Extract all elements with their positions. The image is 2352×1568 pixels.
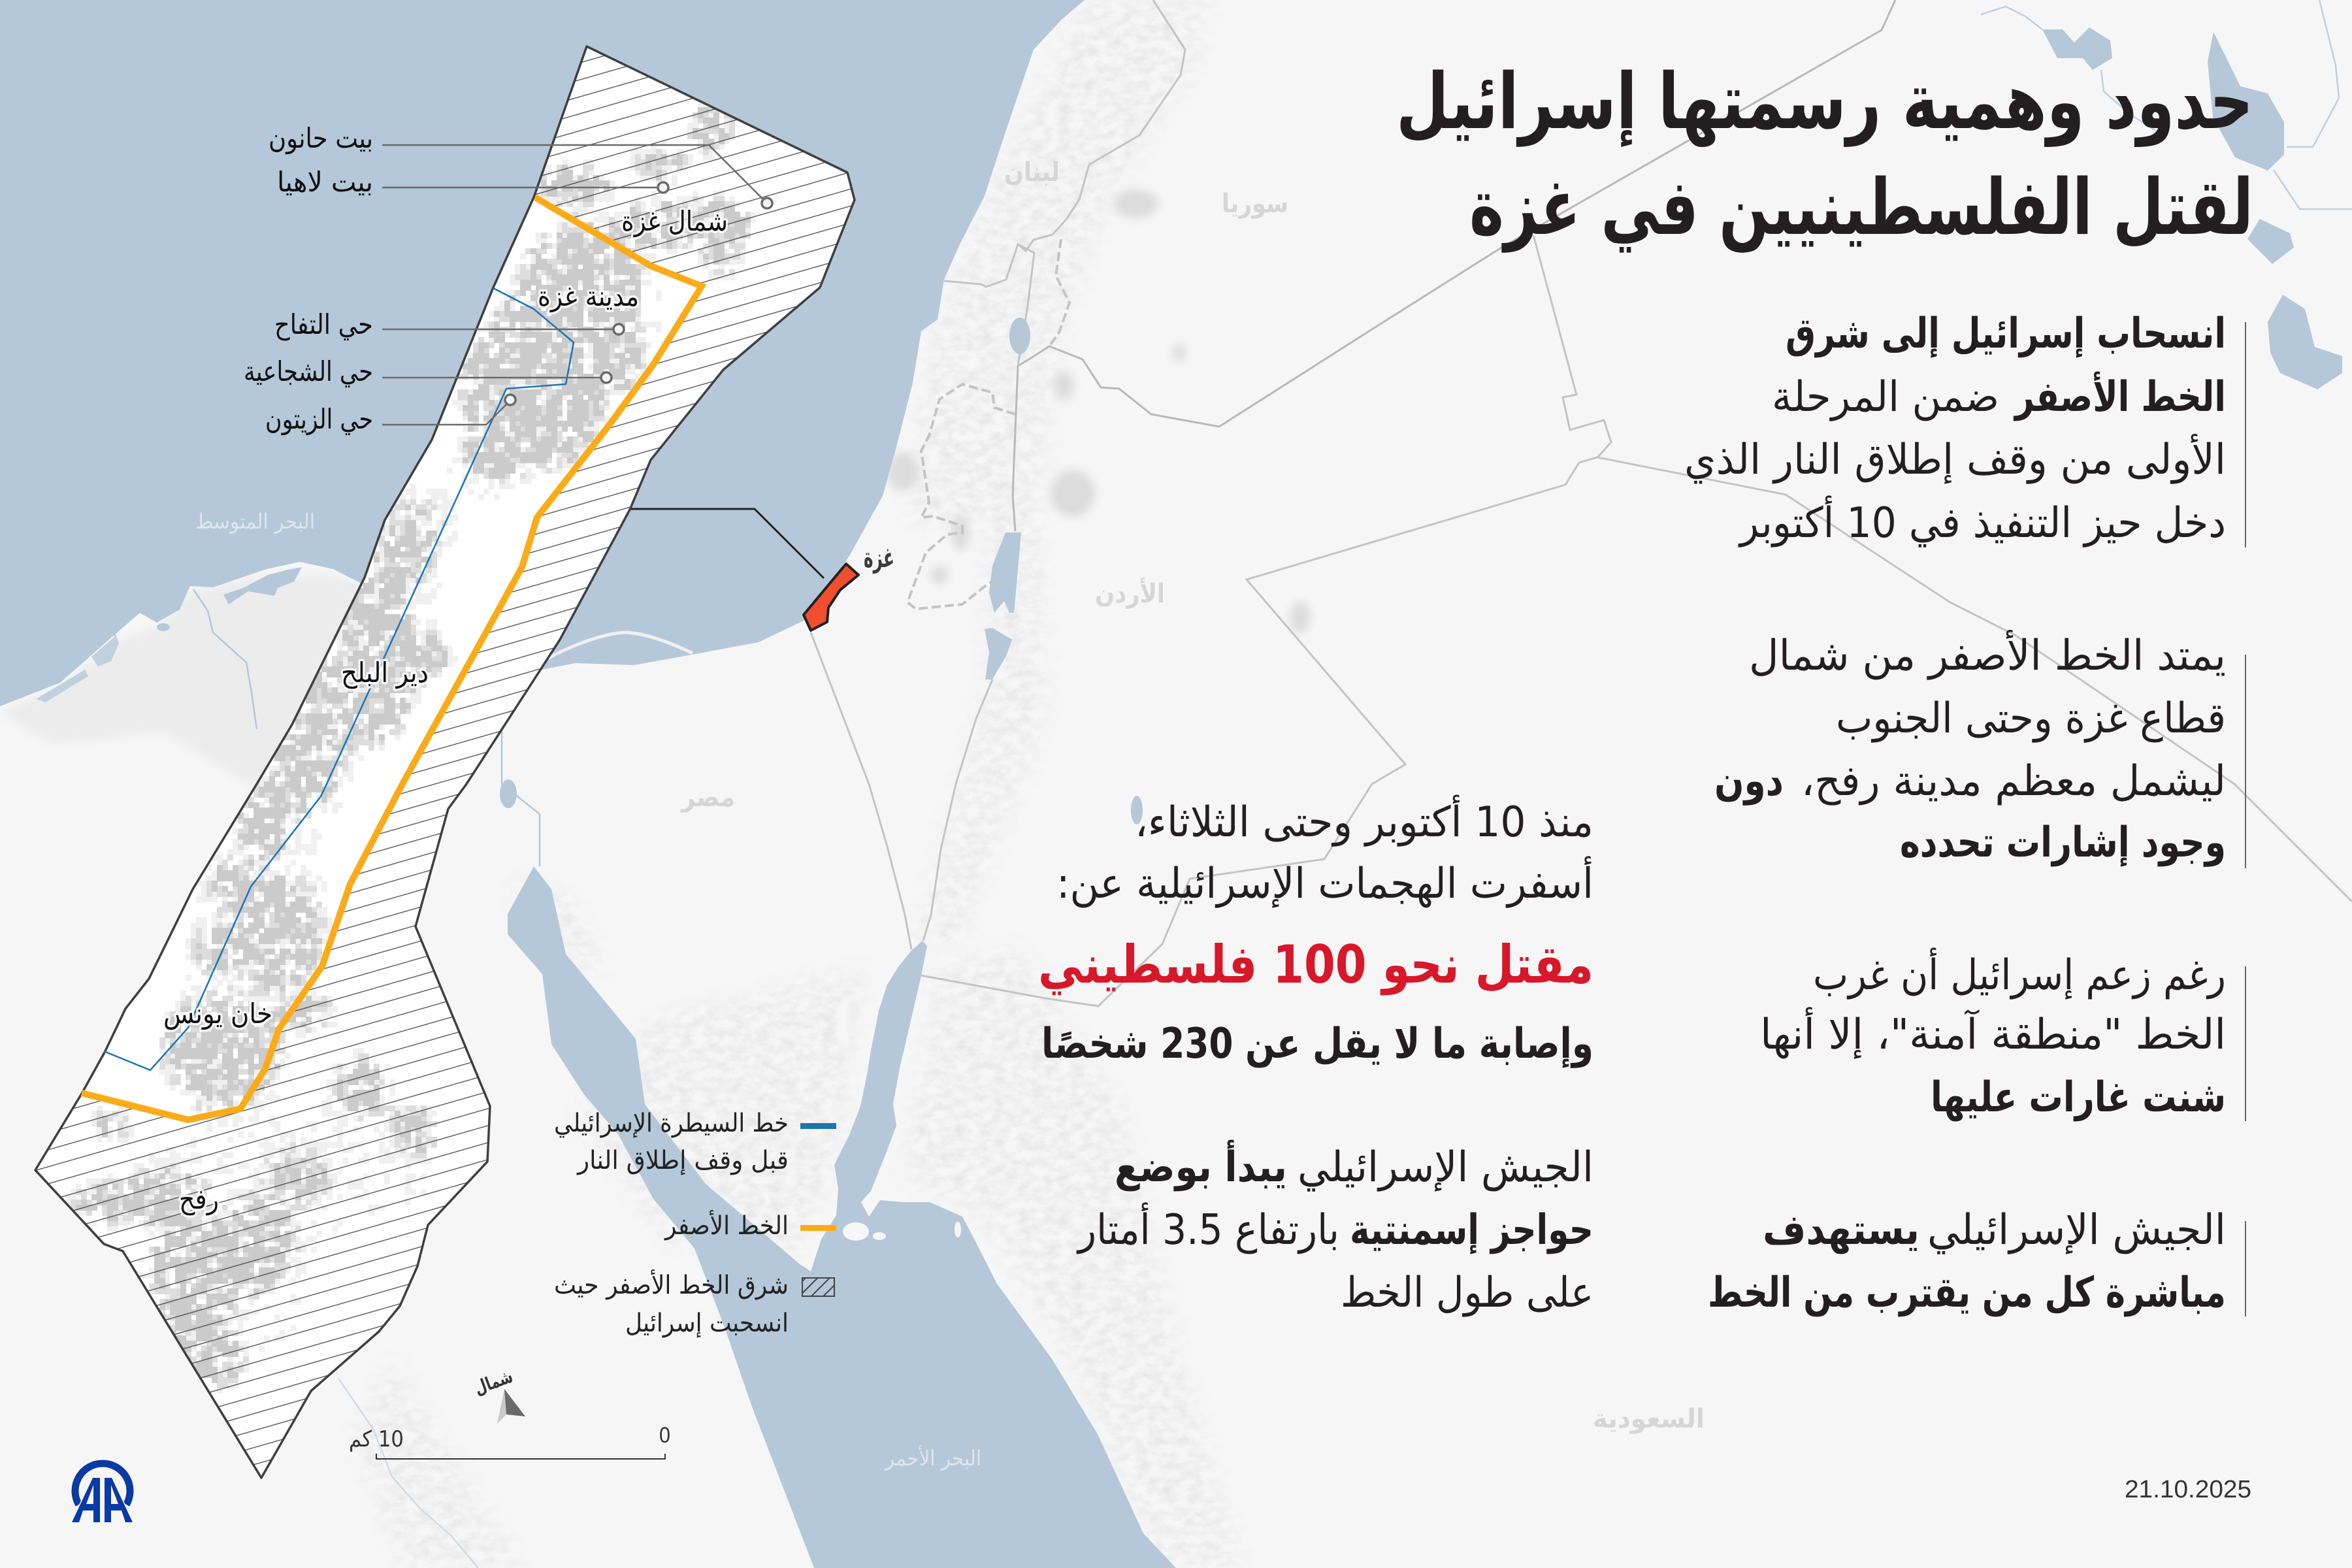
text block: yellow line extent: وجود إشارات تحدده: [1900, 819, 2226, 867]
label: khan younis: خان يونس: [163, 998, 272, 1030]
text block: yellow line extent: دون: [1714, 757, 1784, 806]
text block: casualties: أسفرت الهجمات الإسرائيلية عن:: [1056, 856, 1593, 908]
text block: army targeting: [1708, 1206, 2246, 1317]
red sea and gulfs: [508, 866, 1176, 1568]
scale bar: 10 كم: [349, 1426, 404, 1452]
locator label: gaza: غزة: [864, 542, 894, 574]
text block: army targeting: يستهدف: [1763, 1206, 1919, 1254]
leader: beit hanoun: [382, 145, 772, 208]
text block: casualties: [1038, 794, 1593, 1068]
locator connector line: [630, 509, 824, 578]
text block: safe zone claim: الخط "منطقة آمنة"، إلا أنها: [1760, 1007, 2226, 1059]
inland lakes: [985, 27, 2342, 825]
nile delta: [0, 575, 372, 797]
country label: saudi arabia: السعودية: [1593, 1404, 1705, 1434]
text block: withdrawal: دخل حيز التنفيذ في 10 أكتوبر: [1738, 495, 2226, 547]
leader: zeitoun: [382, 395, 515, 425]
built-up areas: [67, 98, 758, 1392]
yellow line: [82, 197, 702, 1120]
text block: army targeting: مباشرة كل من يقترب من الخط: [1708, 1269, 2226, 1317]
text block: concrete barriers: يبدأ بوضع: [1115, 1139, 1287, 1192]
casualties: killed: مقتل نحو 100 فلسطيني: [1038, 934, 1593, 996]
text block: yellow line extent: قطاع غزة وحتى الجنوب: [1836, 694, 2226, 743]
hatched area east of the yellow line: [35, 46, 855, 1478]
rivers: [1981, 0, 2352, 209]
mediterranean sea: [0, 0, 1085, 706]
legend item: hatched withdrawal area: [554, 1269, 834, 1338]
sea label: red sea: البحر الأحمر: [884, 1445, 981, 1471]
text block: concrete barriers: الجيش الإسرائيلي: [1298, 1143, 1593, 1192]
text block: concrete barriers: على طول الخط: [1341, 1269, 1593, 1317]
text block: withdrawal: الأولى من وقف إطلاق النار الذي: [1684, 433, 2226, 484]
north arrow: [472, 1365, 525, 1424]
label: rafah: رفح: [179, 1183, 219, 1216]
scattered low-density settlement: [118, 261, 686, 1392]
legend item: yellow line: الخط الأصفر: [664, 1209, 789, 1241]
sea label: mediterranean: البحر المتوسط: [195, 509, 315, 534]
north arrow: شمال: [472, 1365, 515, 1399]
legend item: pre-ceasefire control line: خط السيطرة الإسرائيلي: [554, 1109, 789, 1138]
locator: gaza strip in red: [804, 564, 858, 630]
text block: safe zone claim: رغم زعم إسرائيل أن غرب: [1813, 947, 2226, 1000]
pre-ceasefire israeli control line: [104, 288, 574, 1070]
bitter lake: [500, 779, 517, 808]
title: [1396, 56, 2253, 253]
country label: egypt: مصر: [680, 783, 735, 813]
country label: jordan: الأردن: [1095, 577, 1165, 609]
legend: [554, 1109, 836, 1338]
delta lakes: [36, 567, 302, 702]
text block: concrete barriers: بارتفاع 3.5 أمتار: [1076, 1202, 1339, 1254]
disputed territory borders: [907, 239, 1070, 609]
text block: safe zone claim: شنت غارات عليها: [1931, 1073, 2226, 1122]
strip outline: [35, 46, 855, 1478]
label: gaza city: مدينة غزة: [538, 280, 639, 312]
text block: yellow line extent: [1714, 629, 2246, 868]
urban areas: [887, 189, 1311, 633]
text block: yellow line extent: يمتد الخط الأصفر من شمال: [1749, 629, 2226, 680]
leader: shujaiya: [382, 372, 612, 383]
terrain relief: [353, 0, 1241, 1568]
bardawil sandbar: [547, 632, 693, 659]
text block: concrete barriers: [1076, 1139, 1593, 1317]
text block: withdrawal: الخط الأصفر: [2014, 371, 2226, 421]
label: zeitoun: حي الزيتون: [265, 403, 373, 436]
panel: gaza strip map: [35, 46, 855, 1478]
text block: withdrawal: ضمن المرحلة: [1772, 373, 1999, 421]
country label: lebanon: لبنان: [1004, 157, 1060, 188]
text block: yellow line extent: ليشمل معظم مدينة رفح،: [1801, 757, 2226, 806]
leader: beit lahia: [382, 182, 668, 193]
label: north gaza: شمال غزة: [621, 205, 728, 237]
legend item: pre-ceasefire control line: [554, 1109, 836, 1175]
label: beit lahia: بيت لاهيا: [277, 166, 373, 198]
leader: tuffah: [382, 324, 624, 335]
casualties: wounded: وإصابة ما لا يقل عن 230 شخصًا: [1041, 1020, 1593, 1068]
legend item: pre-ceasefire control line: قبل وقف إطلاق النار: [576, 1146, 789, 1175]
date: 21.10.2025: [2125, 1476, 2251, 1503]
red sea islands: [843, 1222, 961, 1241]
strip background: [35, 46, 855, 1478]
label: tuffah: حي التفاح: [274, 308, 373, 341]
text block: withdrawal: انسحاب إسرائيل إلى شرق: [1786, 310, 2226, 358]
text block: safe zone claim: [1760, 947, 2246, 1122]
legend item: hatched withdrawal area: انسحبت إسرائيل: [625, 1309, 789, 1338]
country label: syria: سوريا: [1222, 189, 1288, 219]
scale bar: 0: [659, 1423, 670, 1448]
anadolu agency logo: [72, 1463, 133, 1522]
scale bar: [349, 1423, 670, 1459]
legend item: hatched withdrawal area: شرق الخط الأصفر حيث: [554, 1269, 789, 1300]
label: beit hanoun: بيت حانون: [269, 122, 373, 154]
text block: army targeting: الجيش الإسرائيلي: [1927, 1206, 2226, 1254]
text block: concrete barriers: حواجز إسمنتية: [1350, 1206, 1593, 1254]
label: shujaiya: حي الشجاعية: [244, 355, 373, 388]
label: deir al-balah: دير البلح: [341, 657, 429, 689]
text block: casualties: منذ 10 أكتوبر وحتى الثلاثاء،: [1135, 794, 1593, 847]
text block: withdrawal: [1684, 310, 2246, 547]
nile branches: [193, 589, 540, 1568]
country borders: [811, 0, 2352, 1006]
